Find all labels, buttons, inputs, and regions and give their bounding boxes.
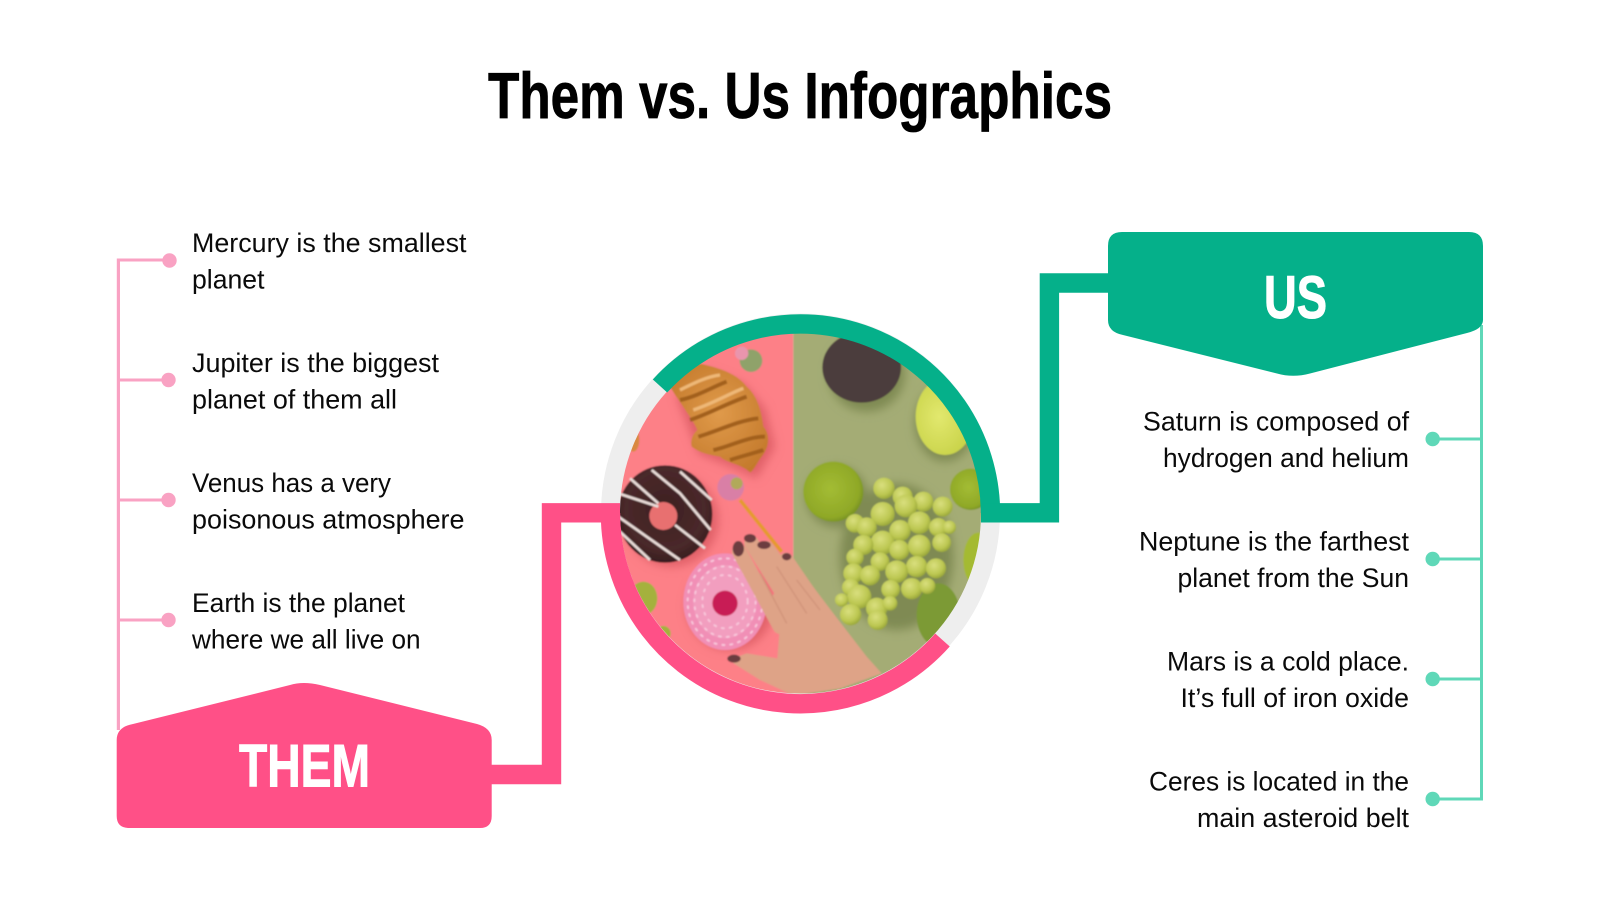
text: Saturn: [1143, 406, 1410, 473]
text: Earth: Earth is the planet: [192, 588, 406, 618]
US badge: US: [1264, 264, 1327, 331]
central photo: sweets and fruit: [620, 334, 981, 694]
text: Earth: where we all live on: [191, 624, 421, 654]
text: Saturn: Saturn is composed of: [1143, 406, 1410, 436]
text: Jupiter: Jupiter is the biggest: [192, 348, 440, 378]
chocolate donut: [618, 465, 712, 563]
croissant: [670, 364, 768, 472]
fruit shadows: [806, 335, 975, 630]
text: Ceres: Ceres is located in the: [1149, 766, 1409, 796]
lollipop top: [735, 347, 762, 372]
text: Mercury: [192, 228, 467, 294]
gray ring: [610, 323, 990, 703]
text: Neptune: planet from the Sun: [1178, 563, 1409, 593]
text: Neptune: [1139, 526, 1410, 593]
text: Mars: It’s full of iron oxide: [1180, 683, 1409, 713]
text: Venus: [192, 468, 464, 534]
hand: [727, 534, 882, 695]
title: Them vs. Us Infographics: [488, 59, 1112, 132]
text: Jupiter: planet of them all: [192, 384, 397, 414]
text: Ceres: main asteroid belt: [1197, 803, 1410, 833]
pink donut: [683, 553, 767, 650]
text: Earth: [191, 588, 421, 654]
text: Mars: [1167, 646, 1409, 713]
text: Ceres: [1149, 766, 1410, 833]
THEM badge: [117, 683, 492, 828]
THEM badge: THEM: [239, 732, 370, 800]
THEM list connector: [117, 253, 177, 730]
US list connector: [1426, 325, 1483, 806]
text: Neptune: Neptune is the farthest: [1139, 526, 1410, 556]
text: Mars: Mars is a cold place.: [1167, 646, 1409, 676]
limes: [803, 462, 993, 647]
text: Mercury: Mercury is the smallest: [192, 228, 467, 258]
soft shadows: [625, 370, 775, 650]
text: Jupiter: [192, 348, 440, 414]
text: Venus: Venus has a very: [192, 468, 392, 498]
text: Venus: poisonous atmosphere: [192, 504, 464, 534]
text: Mercury: planet: [192, 264, 265, 294]
pink arc and connector: [490, 513, 942, 774]
orange edge and lettuce: [627, 428, 671, 641]
green arc and connector: [660, 283, 1110, 513]
text: Saturn: hydrogen and helium: [1163, 443, 1409, 473]
avocado: [822, 332, 901, 403]
lemon: [915, 386, 966, 456]
US badge: [1108, 232, 1483, 376]
grapes: [835, 478, 956, 630]
lollipop stick and head: [717, 474, 782, 552]
